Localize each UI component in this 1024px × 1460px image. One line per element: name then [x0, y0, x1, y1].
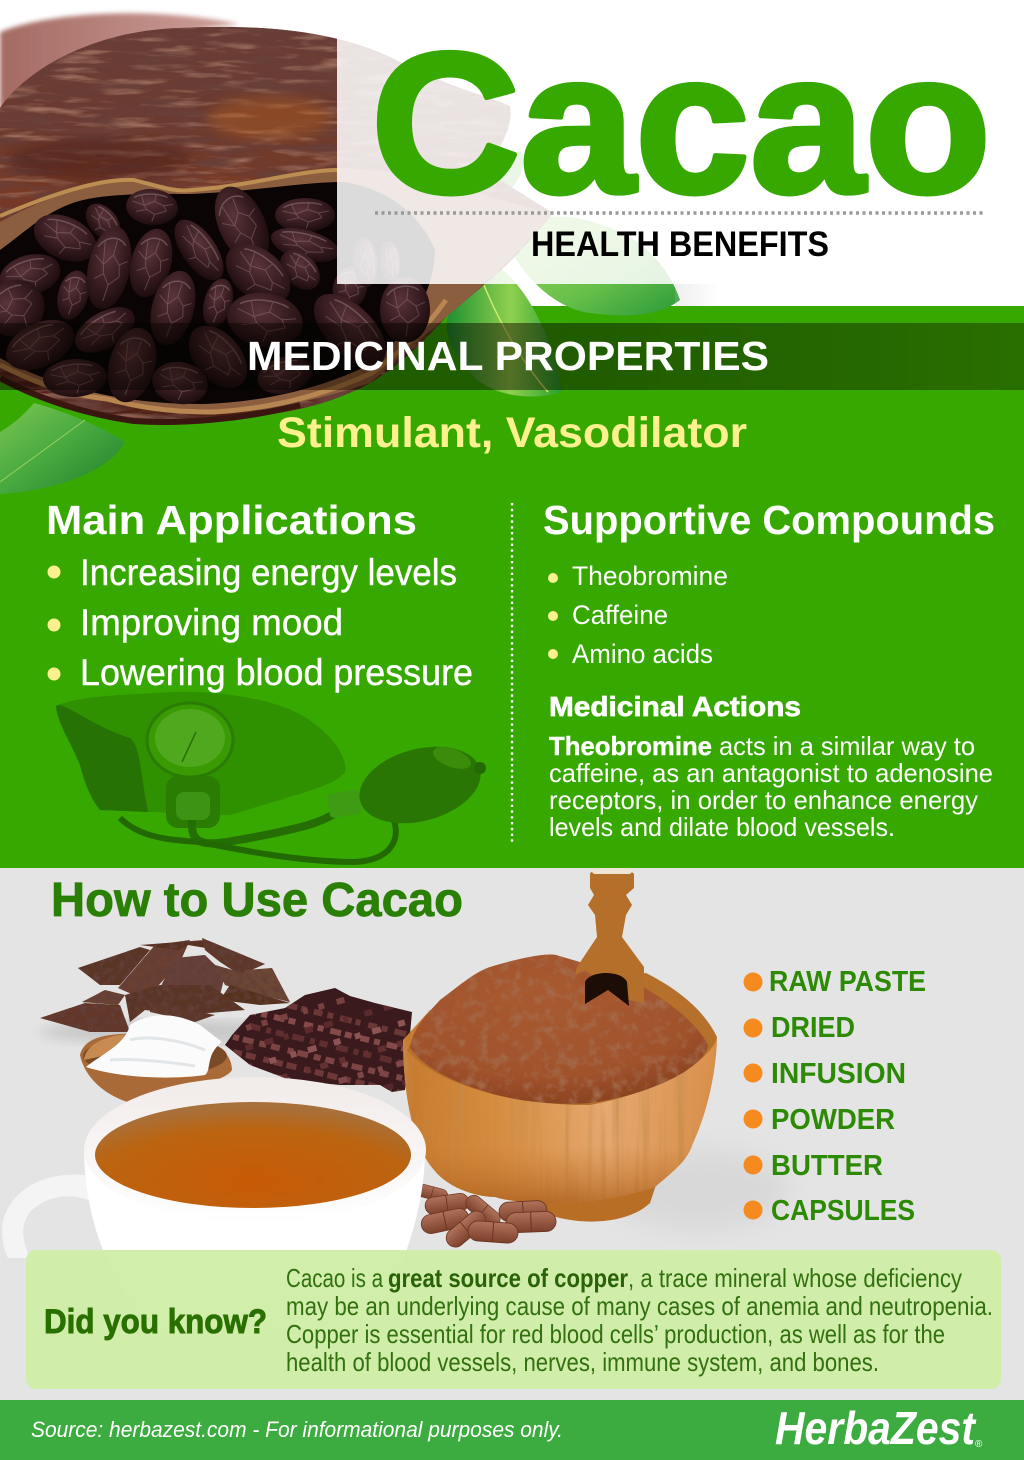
heading: how to use cacao: How to Use Cacao	[51, 874, 463, 927]
illustration: wooden bowl of cacao powder	[403, 868, 717, 1222]
properties subheading: Stimulant, Vasodilator	[277, 409, 747, 457]
text: copper fact: Cacao is a	[286, 1263, 383, 1293]
bullet list: compounds: Caffeine	[572, 600, 668, 630]
white title overlay	[337, 36, 1024, 284]
dotted rule under title	[375, 211, 985, 215]
item: infusion: INFUSION	[771, 1058, 906, 1090]
bullet list: applications: Increasing energy levels	[80, 552, 457, 593]
text: copper fact	[286, 1263, 993, 1377]
text: medicinal actions paragraph	[549, 731, 993, 842]
title: Cacao	[371, 12, 991, 235]
panel: how to use background	[0, 868, 1024, 1400]
medicinal properties heading: MEDICINAL PROPERTIES	[247, 333, 769, 379]
bullet list: compounds: Theobromine	[572, 561, 728, 591]
illustration: cacao nibs	[225, 988, 412, 1092]
panel: did you know	[26, 1250, 1001, 1389]
text: medicinal actions paragraph: receptors, in order to enhance energy	[549, 785, 978, 815]
icon: rear leaves	[447, 151, 680, 397]
heading: did you know: Did you know?	[44, 1303, 267, 1341]
item: raw paste: RAW PASTE	[769, 966, 926, 998]
beans	[0, 178, 430, 409]
bullet list: compounds	[548, 561, 728, 669]
illustration: small bowl with butter	[80, 1015, 232, 1105]
heading: main applications: Main Applications	[46, 497, 417, 543]
logo: HerbaZest: HerbaZest	[775, 1402, 976, 1454]
illustration: raw paste chunks	[40, 938, 290, 1032]
panel: supportive compounds	[543, 497, 995, 842]
illustration: cup of cacao infusion	[2, 1077, 426, 1258]
text: copper fact: health of blood vessels, nerves, immune system, and bones.	[286, 1347, 879, 1377]
illustration: soft shadows	[40, 1020, 790, 1230]
item: powder: POWDER	[771, 1104, 895, 1136]
shadow under overlay	[675, 284, 720, 306]
source note: Source: herbazest.com - For informational purposes only.	[31, 1417, 563, 1442]
panel: main applications	[46, 497, 473, 693]
registered mark: ®	[975, 1439, 983, 1450]
text: copper fact: , a trace mineral whose deficiency	[628, 1263, 962, 1293]
heading: medicinal actions: Medicinal Actions	[549, 691, 801, 722]
scoop	[575, 868, 644, 1006]
text: copper fact: great source of copper	[388, 1263, 628, 1293]
bullet list: compounds: Amino acids	[572, 639, 713, 669]
bullet list: applications: Lowering blood pressure	[80, 652, 473, 693]
column divider	[511, 503, 513, 843]
illustration: blood pressure monitor	[56, 692, 489, 862]
bullet list: applications: Improving mood	[80, 602, 343, 643]
bullet list: applications	[48, 552, 473, 693]
icon: rear blurred cacao pod	[0, 13, 240, 125]
subtitle: HEALTH BENEFITS	[531, 225, 829, 264]
footer	[0, 1400, 1024, 1460]
icon: bottom left leaf	[0, 403, 125, 494]
illustration: capsules	[415, 1183, 556, 1251]
item: butter: BUTTER	[771, 1150, 883, 1182]
text: medicinal actions paragraph: levels and dilate blood vessels.	[549, 812, 895, 842]
icon: cacao pod with beans	[0, 27, 553, 424]
item: capsules: CAPSULES	[771, 1195, 915, 1227]
heading: supportive compounds: Supportive Compounds	[543, 497, 995, 543]
medicinal properties band	[0, 323, 1024, 390]
text: medicinal actions paragraph: acts in a similar way to	[719, 731, 975, 761]
text: medicinal actions paragraph: Theobromine	[549, 731, 712, 761]
panel: medicinal properties green background	[0, 306, 1024, 868]
list: how to use forms	[744, 966, 926, 1227]
text: medicinal actions paragraph: caffeine, as an antagonist to adenosine	[549, 758, 993, 788]
item: dried: DRIED	[771, 1012, 855, 1044]
